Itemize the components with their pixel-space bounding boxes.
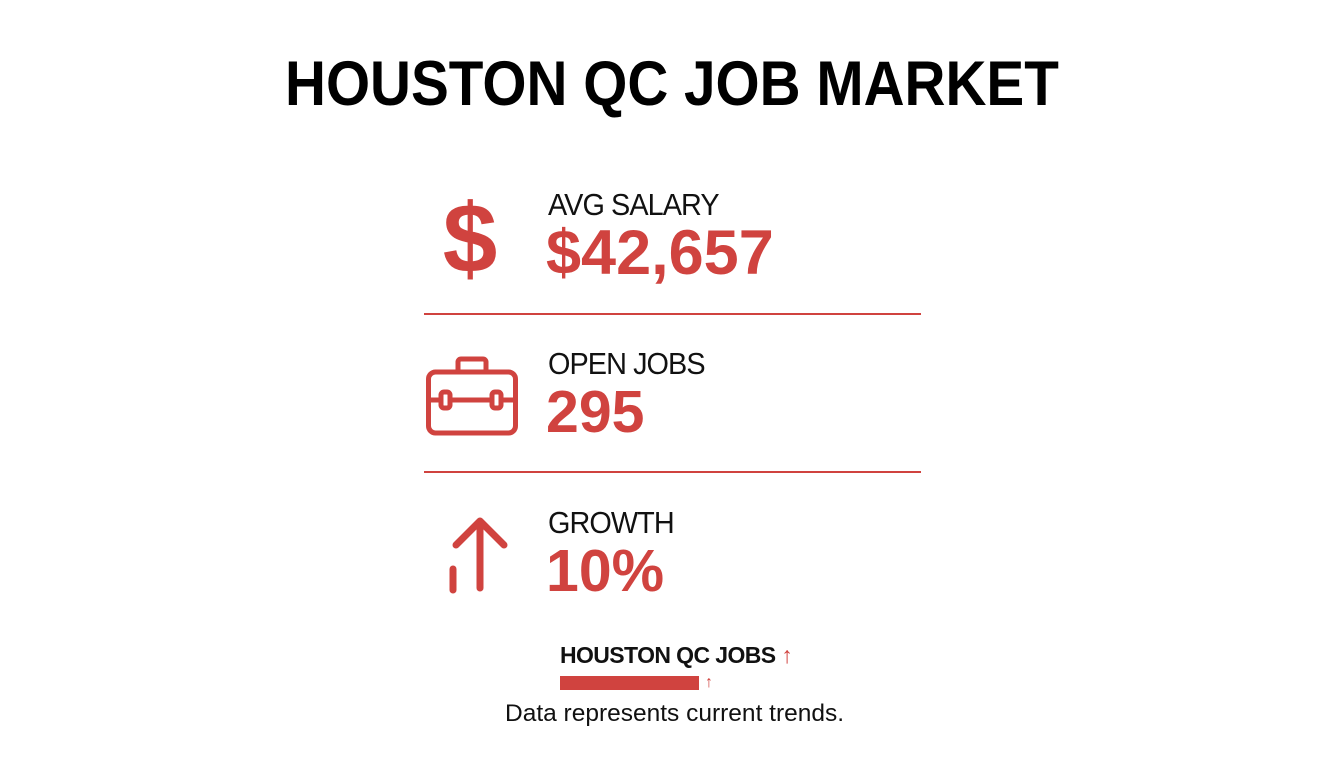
chart title: HOUSTON QC JOBS ↑ [560, 642, 792, 668]
title: HOUSTON QC JOB MARKET [285, 49, 1059, 119]
value: growth: 10% [546, 538, 664, 604]
footer note: Data represents current trends. [505, 700, 844, 727]
bar [560, 676, 699, 690]
label: open jobs: OPEN JOBS [548, 346, 705, 381]
icon: briefcase [426, 356, 518, 436]
value: open jobs: 295 [546, 379, 644, 445]
label: avg salary: AVG SALARY [548, 187, 719, 222]
icon: growth arrow [450, 518, 508, 594]
label: growth: GROWTH [548, 505, 674, 540]
small arrow: ↑ [705, 674, 713, 691]
value: salary: $42,657 [546, 218, 774, 288]
